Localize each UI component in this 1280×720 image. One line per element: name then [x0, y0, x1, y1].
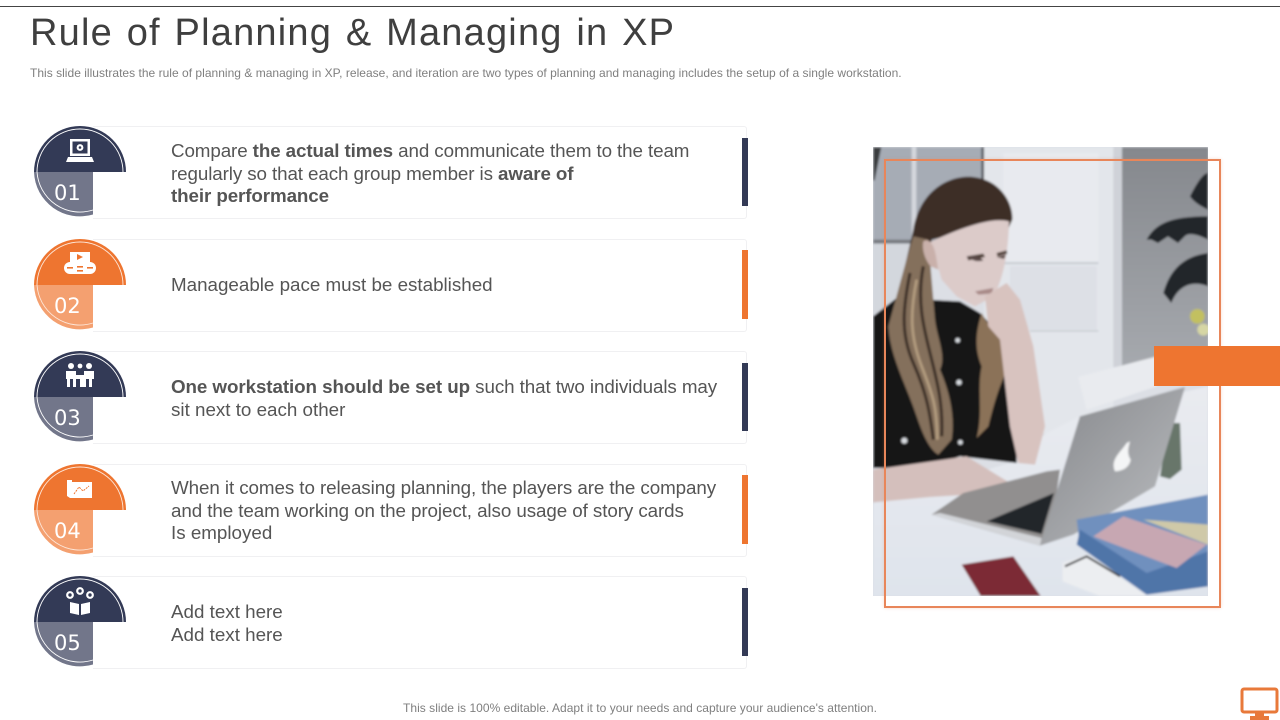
footer note: This slide is 100% editable. Adapt it to your needs and capture your audience's attention. [403, 701, 877, 715]
text 04: Is employed [171, 522, 272, 543]
text 04 [171, 477, 716, 543]
text 02: Manageable pace must be established [171, 274, 493, 295]
badge 04 with map folder icon [34, 464, 126, 554]
panel: step 03 [34, 351, 748, 444]
icon: monitor [1240, 688, 1278, 720]
panel: step 01 [34, 126, 748, 219]
text 03: sit next to each other [171, 399, 345, 420]
text 05: Add text here [171, 624, 283, 645]
panel: step 04 [34, 464, 748, 557]
badge 01 with laptop icon [34, 126, 126, 216]
text 05 [171, 601, 283, 645]
badge 02 with game controller icon: 02 [54, 294, 81, 318]
text 01 [171, 140, 689, 206]
panel: step 05 [34, 576, 748, 669]
photo: woman working at a laptop [873, 147, 1208, 596]
text 01: Compare the actual times and communicate them to the team [171, 140, 689, 161]
accent bar [742, 250, 748, 319]
accent bar [742, 138, 748, 206]
panel: step 02 [34, 239, 748, 332]
title: Rule of Planning & Managing in XP [30, 12, 675, 54]
text 04: and the team working on the project, also usage of story cards [171, 500, 684, 521]
badge 04 with map folder icon: 04 [54, 519, 81, 543]
badge 03 with meeting icon: 03 [54, 406, 81, 430]
badge 02 with game controller icon [34, 239, 126, 330]
text 03: One workstation should be set up such that two individuals may [171, 376, 717, 397]
accent bar [742, 588, 748, 656]
badge 03 with meeting icon [34, 351, 126, 442]
badge 01 with laptop icon: 01 [54, 181, 81, 205]
top rule [0, 6, 1280, 7]
badge 05 with gears and book icon: 05 [54, 631, 81, 655]
accent bar [742, 363, 748, 431]
text 01: their performance [171, 185, 329, 206]
orange accent block [1154, 346, 1280, 386]
badge 05 with gears and book icon [34, 576, 126, 666]
text 03 [171, 376, 718, 420]
orange photo frame [884, 159, 1221, 608]
subtitle: This slide illustrates the rule of planning & managing in XP, release, and iteration are two types of planning and managing includes the setup of a single workstation. [30, 66, 902, 80]
text 04: When it comes to releasing planning, the players are the company [171, 477, 716, 498]
accent bar [742, 475, 748, 544]
text 01: regularly so that each group member is aware of [171, 163, 573, 184]
text 05: Add text here [171, 601, 283, 622]
